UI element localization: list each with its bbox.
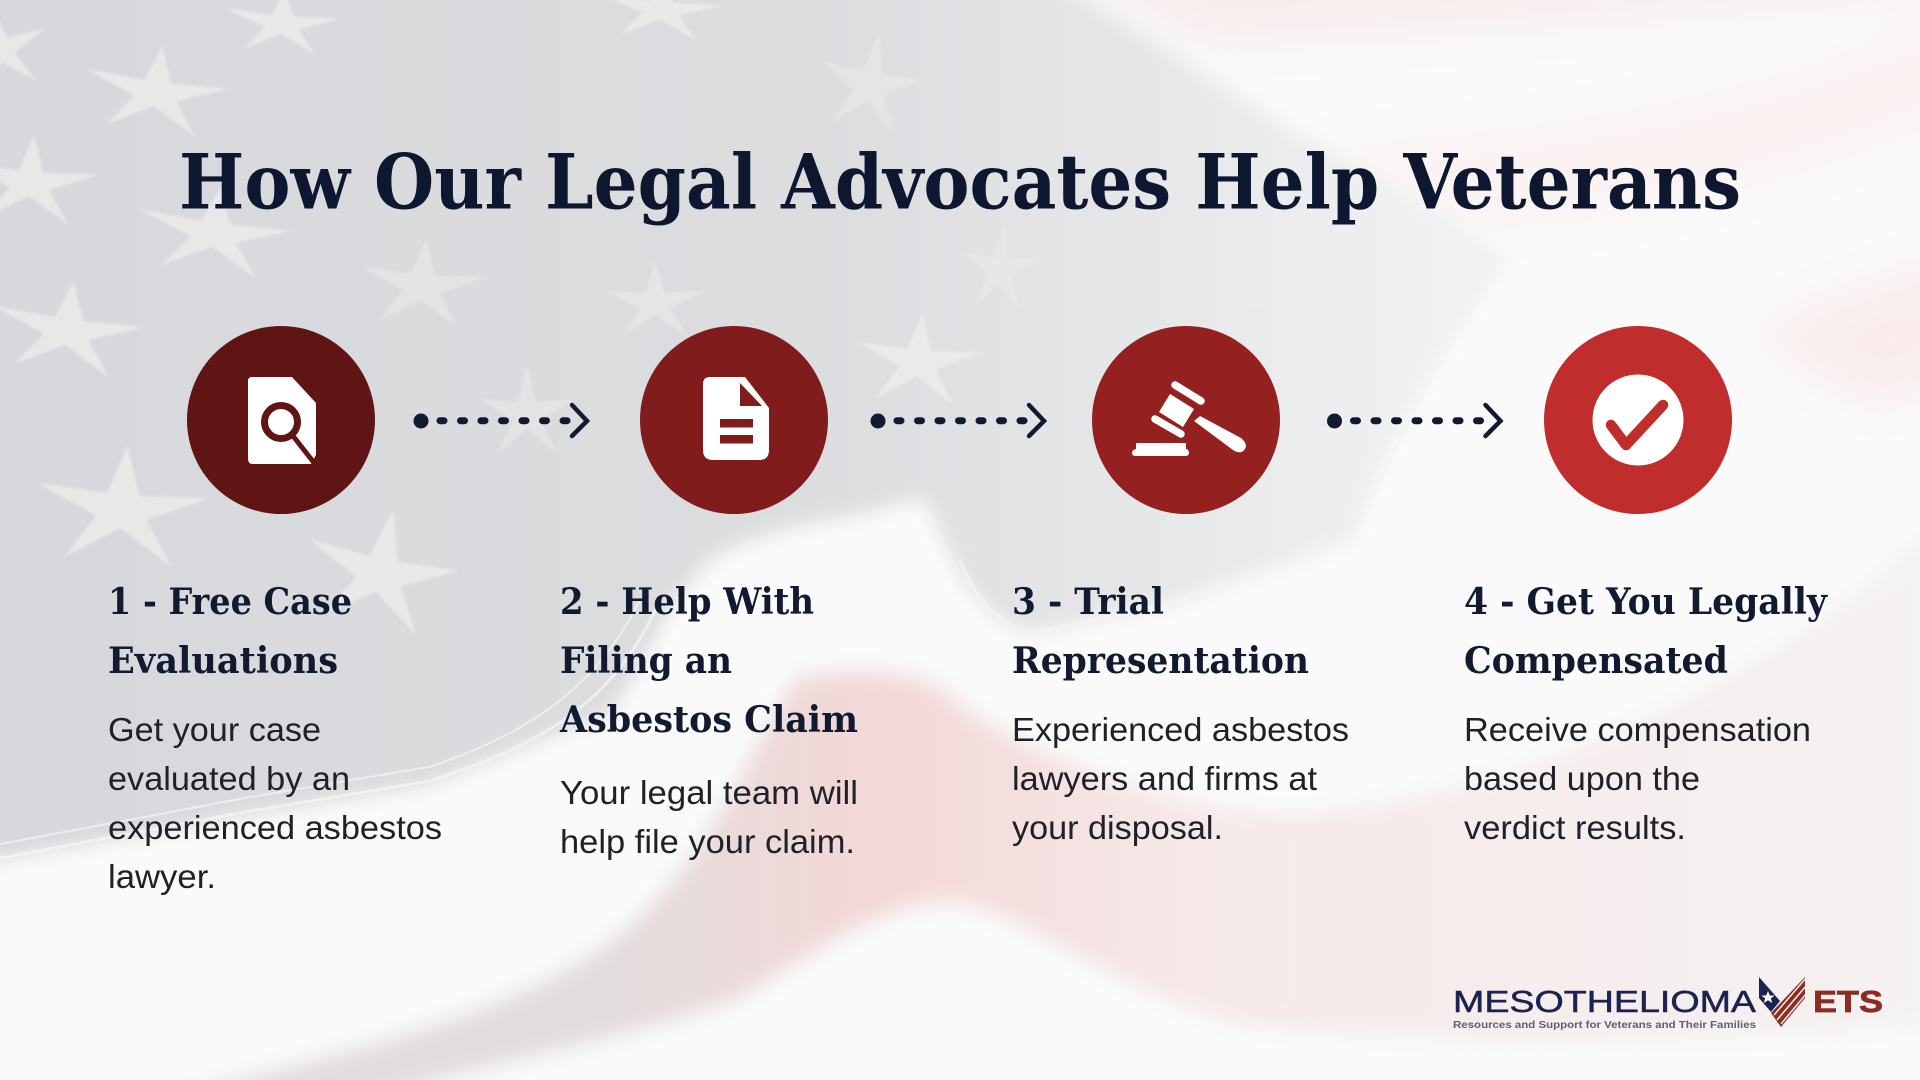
- step 3 text: lawyers and firms at: [1012, 760, 1317, 797]
- title: How Our Legal Advocates Help Veterans: [179, 138, 1741, 226]
- step 3 text: 3 - Trial: [1012, 580, 1164, 623]
- step 4 text: based upon the: [1464, 760, 1700, 797]
- flag seams: [0, 270, 1500, 860]
- step 1 text: experienced asbestos: [108, 809, 442, 846]
- step 2 text: 2 - Help With: [560, 580, 814, 623]
- step 1 text: evaluated by an: [108, 760, 350, 797]
- step 4 text: Compensated: [1464, 639, 1728, 682]
- logo: Mesothelioma Vets: [1453, 977, 1883, 1031]
- step 1 text: 1 - Free Case: [108, 580, 352, 623]
- step 3 text: Experienced asbestos: [1012, 711, 1349, 748]
- step 1 icon: document with magnifier: [187, 326, 375, 514]
- step 1 text: Evaluations: [108, 639, 338, 682]
- step 3 text: Representation: [1012, 639, 1309, 682]
- step 3 text: [1012, 580, 1349, 846]
- step 4 text: [1464, 580, 1829, 846]
- step 2 icon: document: [640, 326, 828, 514]
- arrow 1: [414, 405, 587, 436]
- step 3 icon: gavel: [1092, 326, 1280, 514]
- logo: Mesothelioma Vets: ETS: [1813, 984, 1883, 1019]
- arrow 3: [1327, 405, 1500, 436]
- stars: [0, 0, 985, 641]
- step 1 text: lawyer.: [108, 858, 216, 895]
- step 4 text: verdict results.: [1464, 809, 1686, 846]
- step 2 text: help file your claim.: [560, 823, 855, 860]
- logo: Mesothelioma Vets: Resources and Support for Veterans and Their Families: [1453, 1019, 1756, 1031]
- step 2 text: Filing an: [560, 639, 732, 682]
- logo: Mesothelioma Vets: MESOTHELIOMA: [1453, 984, 1756, 1019]
- step 4 icon: check mark: [1544, 326, 1732, 514]
- arrow 2: [870, 405, 1044, 436]
- step 4 text: Receive compensation: [1464, 711, 1811, 748]
- step 1 text: [108, 580, 442, 895]
- step 2 text: Your legal team will: [560, 774, 858, 811]
- step 4 text: 4 - Get You Legally: [1464, 580, 1829, 623]
- step 1 text: Get your case: [108, 711, 321, 748]
- step 2 text: Asbestos Claim: [559, 698, 858, 741]
- step 2 text: [559, 580, 858, 860]
- step 3 text: your disposal.: [1012, 809, 1223, 846]
- blue canton shown as pale grey: [0, 0, 1511, 866]
